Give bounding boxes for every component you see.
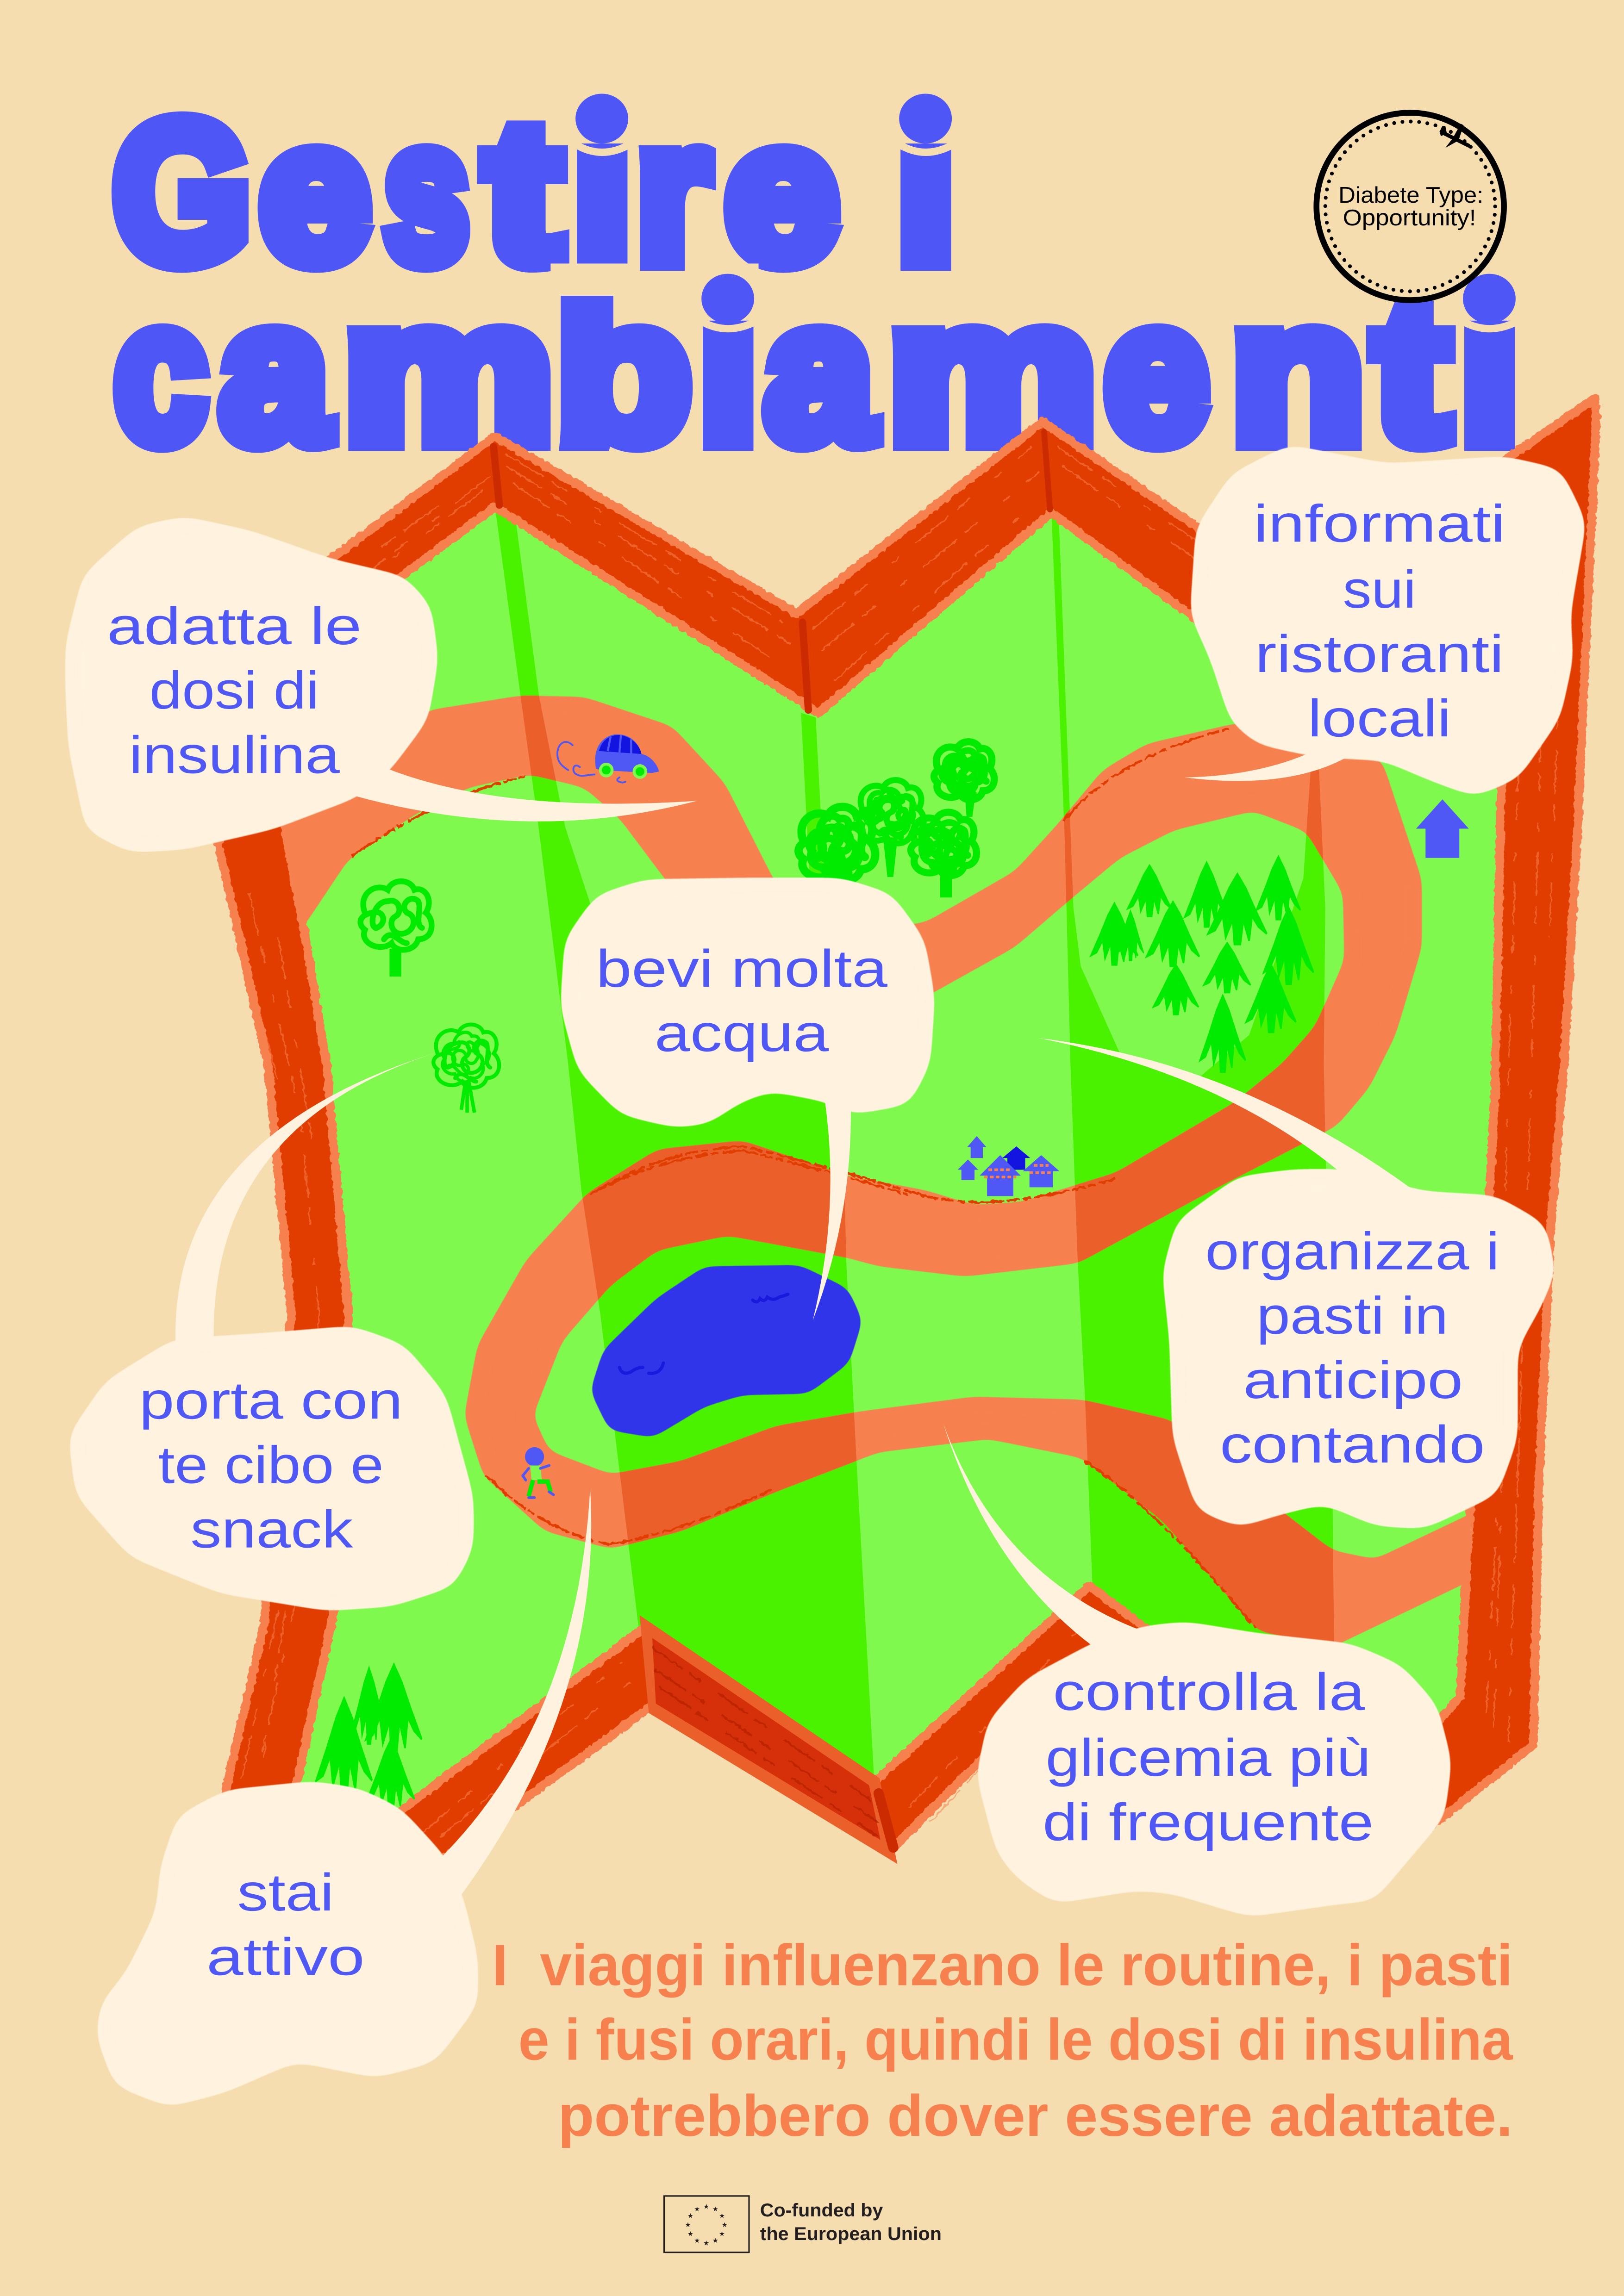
icon: EU flag: ★ bbox=[712, 2237, 718, 2245]
callout: stai attivo: stai bbox=[237, 1863, 334, 1922]
frame fold creases bbox=[493, 432, 1050, 1848]
callout: adatta le dosi di insulina: insulina bbox=[129, 726, 340, 784]
map bbox=[218, 398, 1596, 1962]
tree: left big bbox=[361, 881, 431, 977]
callout: stai attivo: attivo bbox=[206, 1928, 365, 1986]
badge: Diabete Type Opportunity: Diabete Type: bbox=[1338, 183, 1483, 208]
title: t bbox=[486, 81, 561, 303]
title: i bbox=[699, 261, 757, 483]
text block: travel note: e i fusi orari, quindi le dosi di insulina bbox=[518, 2007, 1513, 2072]
callout: organizza i pasti in anticipo contando: contando bbox=[1220, 1415, 1485, 1474]
badge: Diabete Type Opportunity bbox=[1317, 113, 1504, 300]
title: c bbox=[115, 261, 206, 483]
winding road bbox=[249, 696, 1482, 1647]
callout: controlla la glicemia più di frequente: controlla la bbox=[1053, 1663, 1365, 1722]
icon: EU flag: ★ bbox=[694, 2206, 700, 2213]
callout: bevi molta acqua: acqua bbox=[655, 1004, 829, 1063]
callout: bevi molta acqua bbox=[558, 876, 937, 1320]
icon: EU flag bbox=[664, 2196, 749, 2252]
callout: controlla la glicemia più di frequente bbox=[943, 1423, 1454, 1919]
icon: plane bbox=[1439, 124, 1469, 148]
callout: informati sui ristoranti locali: locali bbox=[1308, 689, 1451, 748]
pine trees: bottom left bbox=[316, 1665, 422, 1810]
callout: informati sui ristoranti locali: ristoranti bbox=[1255, 625, 1504, 684]
callout: organizza i pasti in anticipo contando: pasti in bbox=[1256, 1287, 1448, 1345]
tree group: centre bbox=[799, 742, 994, 897]
title: i bbox=[897, 81, 955, 303]
title: r bbox=[637, 81, 709, 303]
icon: EU flag: ★ bbox=[694, 2237, 700, 2245]
title: e bbox=[1105, 261, 1208, 483]
map frame bbox=[218, 398, 1596, 1962]
callout: bevi molta acqua: bevi molta bbox=[596, 940, 888, 998]
icon: EU flag: ★ bbox=[687, 2231, 693, 2238]
icon: EU flag: ★ bbox=[712, 2206, 718, 2213]
frame brush streaks bbox=[234, 447, 1567, 1837]
map paper: light green bbox=[278, 507, 1508, 1900]
callout: informati sui ristoranti locali bbox=[1185, 442, 1589, 799]
title bbox=[113, 81, 1520, 483]
tree: left thin bbox=[433, 1025, 499, 1113]
callout: porta con te cibo e snack bbox=[66, 1047, 476, 1613]
icon: EU flag: ★ bbox=[703, 2240, 709, 2247]
road brush edges bbox=[351, 728, 1255, 1628]
footer: EU co-funding logo: Co-funded by bbox=[760, 2200, 883, 2221]
text block: travel note: I viaggi influenzano le routine, i pasti bbox=[492, 1932, 1513, 1997]
village bbox=[958, 1136, 1060, 1196]
title: a bbox=[765, 261, 874, 483]
callout: informati sui ristoranti locali: informati bbox=[1254, 494, 1505, 553]
title: i bbox=[573, 81, 631, 303]
badge: Diabete Type Opportunity: Opportunity! bbox=[1343, 205, 1476, 230]
callout: adatta le dosi di insulina: adatta le bbox=[107, 597, 362, 656]
text block: travel note: potrebbero dover essere adattate. bbox=[558, 2083, 1513, 2148]
callout: organizza i pasti in anticipo contando bbox=[1038, 1038, 1558, 1531]
title: b bbox=[557, 261, 690, 483]
callout: porta con te cibo e snack: te cibo e bbox=[158, 1436, 384, 1494]
title: e bbox=[726, 81, 838, 303]
text block: travel note bbox=[492, 1932, 1513, 2148]
trees bbox=[361, 742, 994, 1113]
footer: EU co-funding logo: the European Union bbox=[760, 2224, 942, 2244]
map frame: darker fold section bbox=[646, 1626, 889, 1852]
pine forest bbox=[1091, 857, 1313, 1072]
title: m bbox=[344, 261, 553, 483]
icon: EU flag: ★ bbox=[685, 2221, 691, 2229]
title: G bbox=[113, 81, 250, 303]
icon: car bbox=[557, 734, 659, 783]
title: t bbox=[1375, 261, 1449, 483]
title: e bbox=[260, 81, 369, 303]
callout: adatta le dosi di insulina bbox=[63, 514, 697, 855]
callout: organizza i pasti in anticipo contando: anticipo bbox=[1243, 1351, 1463, 1410]
icon: EU flag: ★ bbox=[719, 2212, 725, 2220]
footer: EU co-funding logo bbox=[664, 2196, 942, 2252]
callout: adatta le dosi di insulina: dosi di bbox=[150, 661, 319, 720]
callout: porta con te cibo e snack: porta con bbox=[139, 1371, 403, 1430]
lake bbox=[590, 1265, 862, 1437]
map fold panels: darker green bbox=[495, 507, 1336, 1786]
callout: organizza i pasti in anticipo contando: organizza i bbox=[1205, 1222, 1499, 1281]
callout: informati sui ristoranti locali: sui bbox=[1343, 560, 1416, 619]
icon: house bbox=[1416, 799, 1469, 858]
callout: stai attivo bbox=[94, 1489, 591, 2109]
icon: EU flag: ★ bbox=[687, 2212, 693, 2220]
title: m bbox=[889, 261, 1096, 483]
callout: controlla la glicemia più di frequente: glicemia più bbox=[1046, 1729, 1371, 1787]
title: s bbox=[384, 81, 469, 303]
title: n bbox=[1231, 261, 1364, 483]
icon: EU flag: ★ bbox=[703, 2203, 709, 2210]
callout: porta con te cibo e snack: snack bbox=[190, 1500, 354, 1559]
title: i bbox=[1461, 261, 1519, 483]
icon: EU flag: ★ bbox=[719, 2231, 725, 2238]
icon: EU flag: ★ bbox=[722, 2221, 728, 2229]
icon: runner bbox=[523, 1447, 554, 1498]
title: a bbox=[220, 261, 330, 483]
callout: controlla la glicemia più di frequente: di frequente bbox=[1043, 1793, 1374, 1852]
